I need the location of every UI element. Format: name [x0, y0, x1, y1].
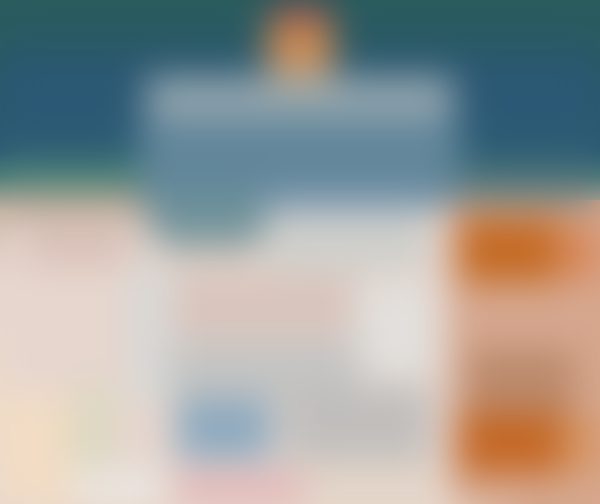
icon: top centre orange badge — [264, 12, 336, 76]
pale green tint — [70, 385, 115, 475]
centre right light card — [355, 285, 433, 375]
right transition band — [440, 170, 600, 200]
left card heading tint — [0, 192, 150, 218]
right column — [450, 200, 600, 504]
centre pink card — [175, 275, 360, 335]
centre middle grey — [170, 340, 360, 400]
bottom pink strip — [175, 474, 305, 504]
right column mid tone — [465, 350, 575, 420]
left bottom light — [75, 470, 165, 504]
grey fade under teal panel — [165, 238, 255, 256]
centre lower grey — [285, 385, 430, 460]
centre top grey card — [268, 222, 428, 268]
subtitle panel — [140, 118, 460, 206]
icon: badge top tint — [268, 0, 332, 20]
lower-right blue panel tint — [265, 190, 430, 212]
lower-left teal panel — [150, 195, 265, 240]
left column light strip — [128, 265, 170, 400]
title banner — [146, 76, 454, 120]
bottom centre pale — [300, 462, 435, 504]
right column base — [440, 200, 600, 504]
right column bottom orange edge — [560, 418, 600, 470]
right column top orange edge — [555, 226, 600, 278]
bottom-left cream area — [0, 395, 75, 504]
header band background — [0, 0, 600, 185]
pink card heading — [25, 232, 130, 262]
right column top orange block — [458, 218, 562, 282]
right column bottom orange block — [458, 412, 566, 474]
lower page background — [0, 195, 600, 504]
chart: blue block — [176, 398, 272, 460]
left green transition band — [0, 165, 150, 189]
icon: badge pale base — [265, 68, 335, 90]
